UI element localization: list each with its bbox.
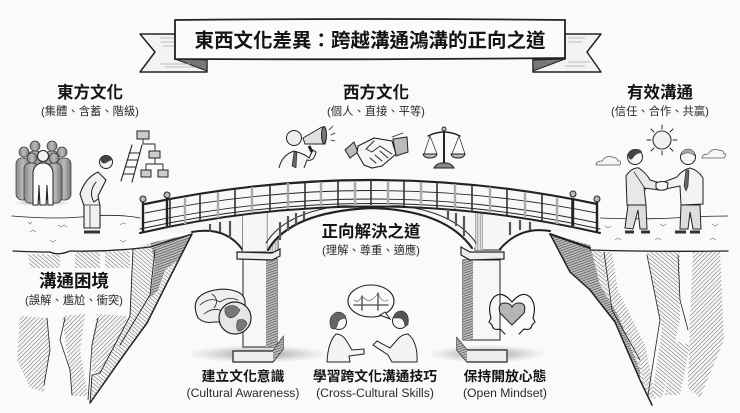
heading: positive solutions: 正向解決之道 xyxy=(322,221,421,241)
heading: communication difficulties: 溝通困境 xyxy=(39,271,109,291)
grass marks left xyxy=(28,222,126,242)
icon: sun xyxy=(647,125,677,155)
heading: communication difficulties xyxy=(25,271,123,307)
caption: open mindset xyxy=(463,368,547,400)
title banner xyxy=(140,19,601,72)
grass marks right xyxy=(605,224,718,240)
caption: cross-cultural skills xyxy=(313,368,437,400)
right pier xyxy=(427,212,547,363)
icon: person with megaphone xyxy=(279,126,335,168)
caption: cultural awareness: 建立文化意識 xyxy=(202,368,285,384)
heading: western culture: 西方文化 xyxy=(343,82,409,102)
heading: eastern culture xyxy=(41,82,139,118)
icon: heart between two heads xyxy=(489,294,535,334)
heading: effective communication xyxy=(611,82,709,118)
title text: 東西文化差異：跨越溝通鴻溝的正向之道 xyxy=(194,29,546,52)
caption: cross-cultural skills: 學習跨文化溝通技巧 xyxy=(313,368,437,384)
speech bubble with bridge xyxy=(348,285,394,319)
heading: western culture xyxy=(327,82,425,118)
icon: ladder and hierarchy xyxy=(121,131,168,182)
icon: left cloud xyxy=(596,156,621,165)
caption: open mindset: 保持開放心態 xyxy=(464,368,547,384)
heading: positive solutions xyxy=(322,221,421,257)
icon: handshake xyxy=(345,133,408,168)
caption: cultural awareness: (Cultural Awareness) xyxy=(187,386,299,400)
left pier xyxy=(186,212,330,363)
heading: eastern culture: (集體、含蓄、階級) xyxy=(41,104,139,118)
bridge xyxy=(140,180,600,363)
icon: two people talking xyxy=(327,285,417,362)
heading: western culture: (個人、直接、平等) xyxy=(327,104,425,118)
ground line left xyxy=(12,215,140,218)
spandrels and arches xyxy=(140,205,600,250)
caption: cultural awareness xyxy=(187,368,299,400)
heading: communication difficulties: (誤解、尷尬、衝突) xyxy=(25,293,123,307)
caption: cross-cultural skills: (Cross-Cultural Skills) xyxy=(316,386,434,400)
right cliff xyxy=(550,216,728,405)
heading: effective communication: 有效溝通 xyxy=(627,82,694,102)
ground line right xyxy=(600,216,728,219)
icon: balance scale xyxy=(423,127,465,168)
icon: brain and globe xyxy=(195,289,251,334)
icon: crowd of people xyxy=(12,141,72,206)
caption: open mindset: (Open Mindset) xyxy=(463,386,547,400)
icon: right cloud xyxy=(702,150,726,158)
icon: two people shaking hands xyxy=(625,149,703,232)
railing xyxy=(140,180,600,233)
heading: eastern culture: 東方文化 xyxy=(57,82,123,102)
heading: positive solutions: (理解、尊重、適應) xyxy=(322,243,420,257)
icon: bowing person xyxy=(80,156,113,232)
heading: effective communication: (信任、合作、共贏) xyxy=(611,104,709,118)
left cliff xyxy=(12,215,192,403)
